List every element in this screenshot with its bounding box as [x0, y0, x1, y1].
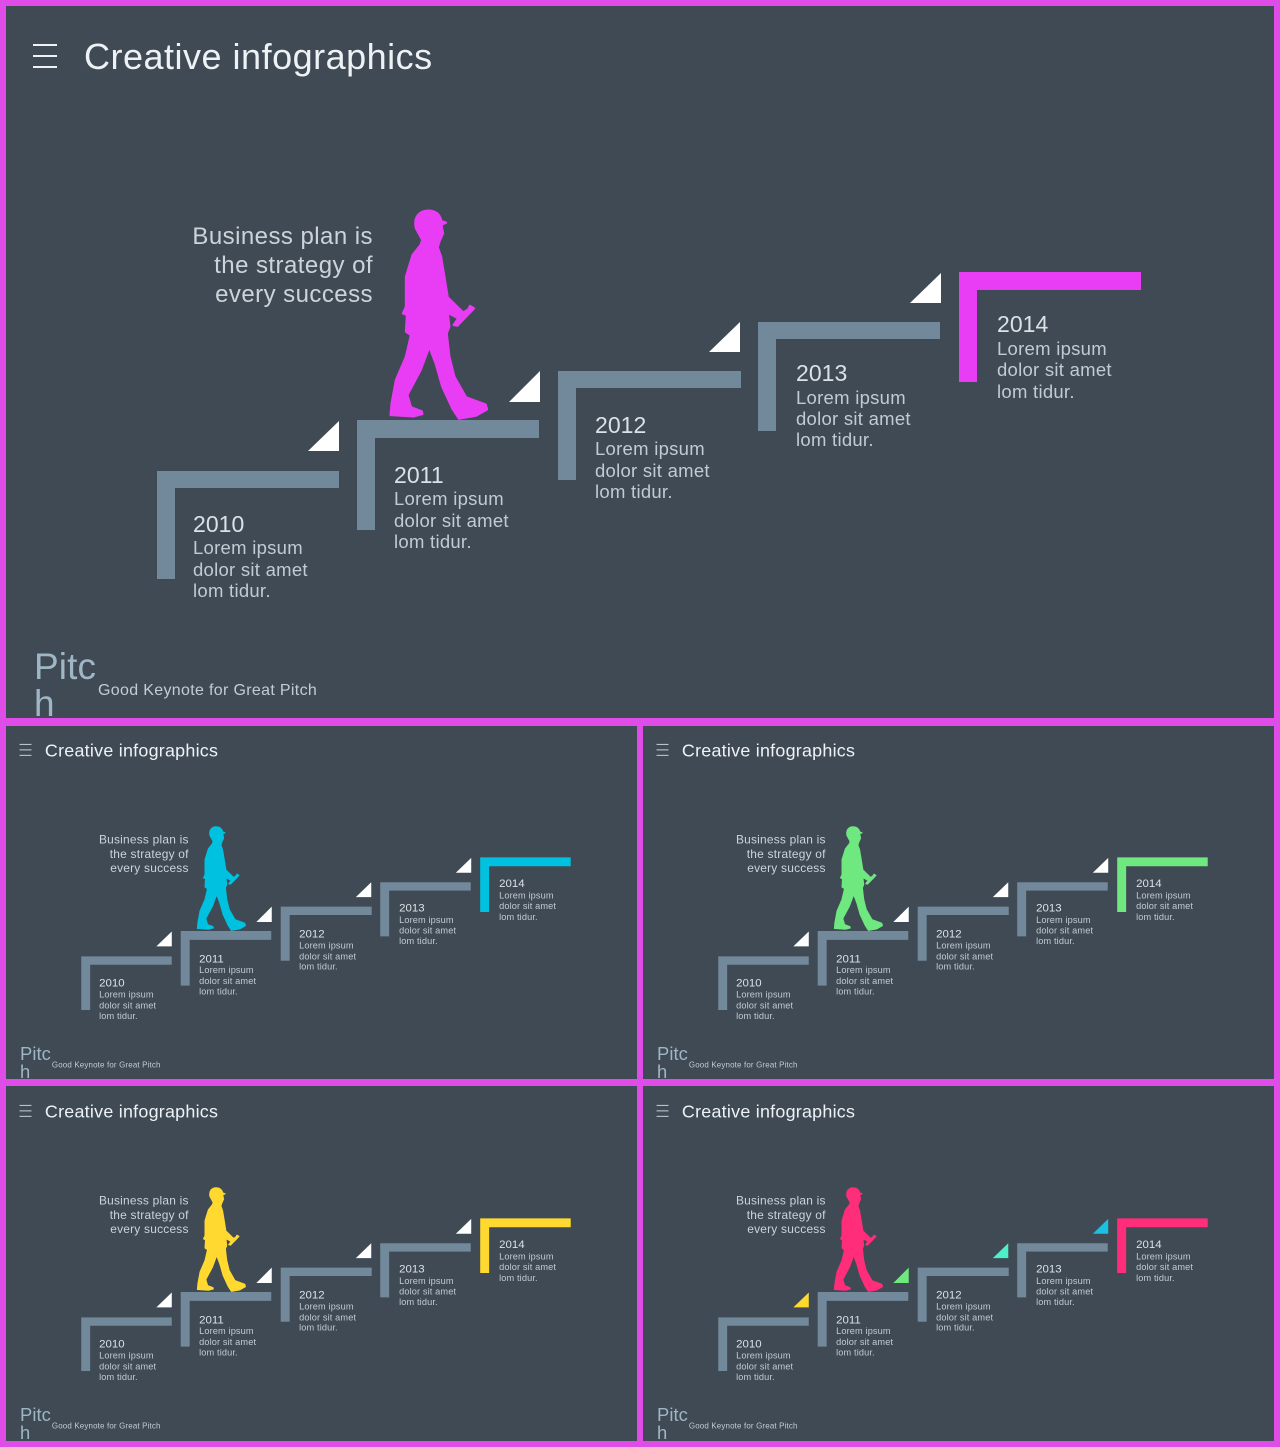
step 2011: dolor sit amet — [199, 1337, 256, 1347]
quote: Business plan is — [736, 833, 826, 847]
step 2013: Lorem ipsum — [1036, 915, 1091, 925]
step 2011: Lorem ipsum — [836, 966, 891, 976]
walker silhouette — [197, 827, 245, 931]
step 2011: lom tidur. — [199, 987, 238, 997]
footer brand: Pitc — [657, 1043, 688, 1064]
step 2010: lom tidur. — [736, 1011, 775, 1021]
step 2010 — [718, 932, 809, 1021]
step 2012 — [281, 883, 372, 972]
footer brand: Good Keynote for Great Pitch — [98, 682, 317, 699]
step 2013: 2013 — [1036, 1264, 1062, 1276]
step 2010 — [718, 1292, 809, 1382]
step 2012: Lorem ipsum — [936, 941, 991, 951]
step 2013 — [380, 1219, 471, 1307]
title: Creative infographics — [682, 1101, 855, 1121]
quote — [99, 1193, 189, 1236]
panel: large magenta — [6, 6, 1274, 718]
quote: every success — [747, 1222, 826, 1236]
step 2013: lom tidur. — [1036, 1297, 1075, 1307]
icon: menu — [20, 1105, 31, 1117]
step 2012: lom tidur. — [299, 962, 338, 972]
footer brand: Good Keynote for Great Pitch — [689, 1422, 798, 1431]
step 2010: 2010 — [736, 1339, 762, 1351]
step 2014: 2014 — [997, 311, 1049, 337]
walker silhouette — [391, 211, 487, 419]
title: Creative infographics — [45, 1101, 218, 1121]
title: Creative infographics — [45, 741, 218, 761]
footer brand: Good Keynote for Great Pitch — [52, 1422, 161, 1431]
step 2011: Lorem ipsum — [836, 1326, 891, 1336]
step 2013: lom tidur. — [399, 936, 438, 946]
footer brand — [34, 646, 317, 724]
step 2014: dolor sit amet — [499, 1262, 556, 1272]
step 2012: dolor sit amet — [299, 1312, 356, 1322]
panel: cyan — [6, 726, 637, 1079]
panel: yellow — [6, 1086, 637, 1441]
step 2011: 2011 — [836, 1314, 861, 1326]
quote: every success — [747, 862, 826, 876]
step 2014: lom tidur. — [1136, 1273, 1175, 1283]
footer brand — [20, 1404, 161, 1443]
step 2014: dolor sit amet — [1136, 901, 1193, 911]
footer brand: Pitc — [20, 1404, 51, 1425]
step 2013 — [758, 273, 941, 450]
step 2013: Lorem ipsum — [796, 387, 906, 408]
step 2011: 2011 — [836, 954, 861, 966]
panel: pink — [643, 1086, 1274, 1441]
step 2012: 2012 — [936, 929, 962, 941]
step 2011: dolor sit amet — [836, 1337, 893, 1347]
step 2012: dolor sit amet — [936, 952, 993, 962]
step 2014: Lorem ipsum — [997, 338, 1107, 359]
step 2010: 2010 — [193, 511, 244, 537]
step 2012: dolor sit amet — [595, 460, 710, 481]
step 2011: dolor sit amet — [199, 976, 256, 986]
step 2010: dolor sit amet — [736, 1001, 793, 1011]
step 2012 — [918, 883, 1009, 972]
step 2012: lom tidur. — [936, 962, 975, 972]
step 2011: 2011 — [394, 462, 444, 488]
step 2013: Lorem ipsum — [399, 915, 454, 925]
step 2011 — [181, 1268, 272, 1358]
quote: Business plan is — [99, 833, 189, 847]
quote: every success — [215, 281, 373, 308]
step 2011: 2011 — [199, 1314, 224, 1326]
step 2012 — [281, 1243, 372, 1333]
panel: green — [643, 726, 1274, 1079]
step 2011: lom tidur. — [199, 1348, 238, 1358]
step 2013: dolor sit amet — [796, 408, 911, 429]
step 2010 — [81, 932, 172, 1021]
walker silhouette — [197, 1188, 245, 1291]
step 2010: lom tidur. — [736, 1372, 775, 1382]
quote: the strategy of — [747, 1208, 826, 1222]
step 2011: lom tidur. — [836, 1348, 875, 1358]
step 2013 — [1017, 858, 1108, 946]
footer brand: Pitc — [20, 1043, 51, 1064]
step 2010: 2010 — [99, 978, 125, 990]
step 2012: 2012 — [936, 1289, 962, 1301]
step 2010: lom tidur. — [99, 1372, 138, 1382]
quote — [192, 223, 373, 308]
step 2011: Lorem ipsum — [394, 488, 504, 509]
step 2010: dolor sit amet — [193, 559, 308, 580]
step 2010: Lorem ipsum — [736, 1351, 791, 1361]
step 2013: lom tidur. — [1036, 936, 1075, 946]
step 2014: lom tidur. — [1136, 912, 1175, 922]
step 2014: Lorem ipsum — [1136, 891, 1191, 901]
step 2010: dolor sit amet — [99, 1001, 156, 1011]
step 2013: dolor sit amet — [399, 926, 456, 936]
step 2010: dolor sit amet — [736, 1362, 793, 1372]
quote: Business plan is — [736, 1193, 826, 1207]
icon: menu — [657, 744, 668, 756]
step 2014: Lorem ipsum — [1136, 1252, 1191, 1262]
step 2012: Lorem ipsum — [299, 1301, 354, 1311]
quote: Business plan is — [99, 1193, 189, 1207]
step 2010 — [81, 1292, 172, 1382]
quote — [736, 833, 826, 876]
footer brand: Good Keynote for Great Pitch — [52, 1061, 161, 1070]
step 2013: dolor sit amet — [1036, 926, 1093, 936]
step 2010: lom tidur. — [99, 1011, 138, 1021]
step 2011 — [818, 1268, 909, 1358]
step 2010: Lorem ipsum — [193, 537, 303, 558]
step 2011: Lorem ipsum — [199, 1326, 254, 1336]
footer brand — [20, 1043, 161, 1083]
step 2011: lom tidur. — [394, 531, 472, 552]
quote: the strategy of — [214, 252, 373, 279]
step 2014: lom tidur. — [499, 1273, 538, 1283]
step 2014: 2014 — [499, 878, 525, 890]
title: Creative infographics — [84, 36, 433, 77]
step 2012: Lorem ipsum — [595, 438, 705, 459]
step 2013: lom tidur. — [796, 429, 874, 450]
step 2013: lom tidur. — [399, 1297, 438, 1307]
quote: the strategy of — [747, 847, 826, 861]
step 2012: lom tidur. — [936, 1323, 975, 1333]
step 2010: Lorem ipsum — [99, 990, 154, 1000]
step 2010: 2010 — [736, 978, 762, 990]
step 2014: dolor sit amet — [499, 901, 556, 911]
step 2014: Lorem ipsum — [499, 891, 554, 901]
step 2013 — [380, 858, 471, 946]
footer brand — [657, 1404, 798, 1443]
quote — [99, 833, 189, 876]
step 2012: Lorem ipsum — [936, 1301, 991, 1311]
icon: menu — [657, 1105, 668, 1117]
step 2011: lom tidur. — [836, 987, 875, 997]
step 2011: dolor sit amet — [836, 976, 893, 986]
step 2014 — [959, 272, 1141, 402]
step 2014: dolor sit amet — [1136, 1262, 1193, 1272]
quote: every success — [110, 1222, 189, 1236]
step 2011 — [357, 371, 540, 552]
step 2012: 2012 — [299, 929, 325, 941]
step 2010 — [157, 421, 339, 601]
step 2014 — [480, 1218, 571, 1283]
icon: menu — [20, 744, 31, 756]
step 2012: Lorem ipsum — [299, 941, 354, 951]
step 2011: Lorem ipsum — [199, 966, 254, 976]
title: Creative infographics — [682, 741, 855, 761]
step 2014: 2014 — [499, 1239, 525, 1251]
step 2013: dolor sit amet — [1036, 1286, 1093, 1296]
step 2012 — [918, 1243, 1009, 1333]
walker silhouette — [834, 827, 882, 931]
quote: every success — [110, 862, 189, 876]
quote: Business plan is — [192, 223, 373, 250]
step 2014 — [1117, 858, 1208, 922]
step 2013: 2013 — [399, 1264, 425, 1276]
step 2010: Lorem ipsum — [99, 1351, 154, 1361]
step 2012: lom tidur. — [299, 1323, 338, 1333]
footer brand: Pitc — [34, 646, 96, 687]
step 2013: Lorem ipsum — [1036, 1276, 1091, 1286]
step 2013 — [1017, 1219, 1108, 1307]
step 2011: dolor sit amet — [394, 510, 509, 531]
step 2014: lom tidur. — [499, 912, 538, 922]
step 2010: 2010 — [99, 1339, 125, 1351]
icon: menu — [33, 44, 57, 68]
step 2013: dolor sit amet — [399, 1286, 456, 1296]
step 2014: 2014 — [1136, 1239, 1162, 1251]
step 2011 — [818, 907, 909, 997]
footer brand — [657, 1043, 798, 1083]
step 2010: dolor sit amet — [99, 1362, 156, 1372]
step 2014: lom tidur. — [997, 381, 1075, 402]
step 2012: dolor sit amet — [299, 952, 356, 962]
step 2014 — [480, 858, 571, 922]
step 2011 — [181, 907, 272, 997]
step 2014: 2014 — [1136, 878, 1162, 890]
footer brand: Pitc — [657, 1404, 688, 1425]
step 2013: 2013 — [1036, 903, 1062, 915]
step 2014: dolor sit amet — [997, 359, 1112, 380]
step 2011: 2011 — [199, 954, 224, 966]
quote: the strategy of — [110, 847, 189, 861]
step 2013: 2013 — [796, 360, 847, 386]
quote — [736, 1193, 826, 1236]
step 2010: lom tidur. — [193, 580, 271, 601]
step 2012 — [558, 322, 741, 502]
walker silhouette — [834, 1188, 882, 1291]
step 2012: 2012 — [595, 412, 646, 438]
footer brand: Good Keynote for Great Pitch — [689, 1061, 798, 1070]
step 2010: Lorem ipsum — [736, 990, 791, 1000]
step 2014: Lorem ipsum — [499, 1252, 554, 1262]
step 2012: 2012 — [299, 1289, 325, 1301]
step 2012: lom tidur. — [595, 481, 673, 502]
quote: the strategy of — [110, 1208, 189, 1222]
step 2013: 2013 — [399, 903, 425, 915]
step 2013: Lorem ipsum — [399, 1276, 454, 1286]
step 2014 — [1117, 1218, 1208, 1283]
step 2012: dolor sit amet — [936, 1312, 993, 1322]
